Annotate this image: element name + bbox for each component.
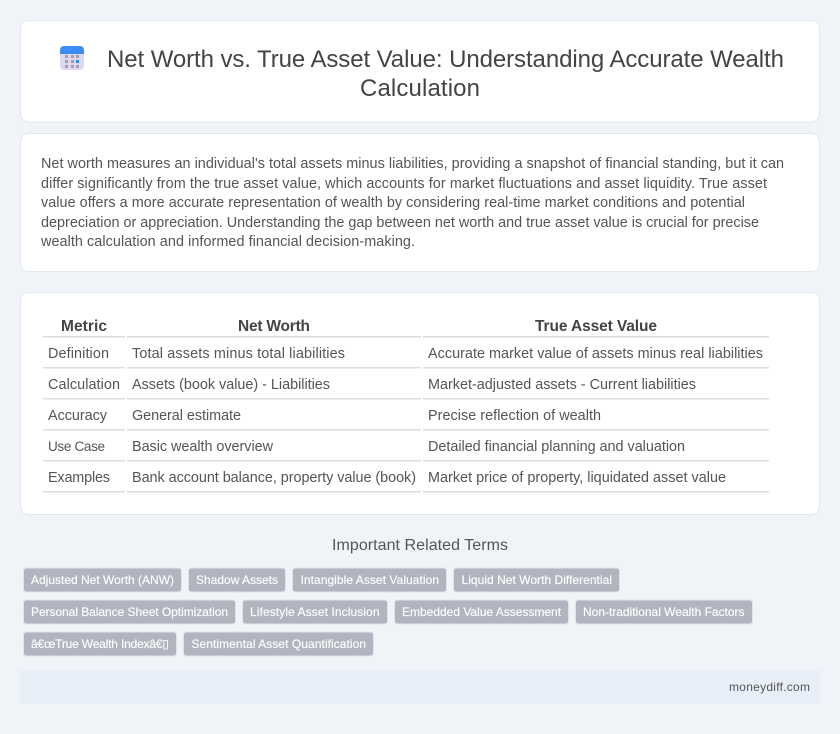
tag: Embedded Value Assessment — [402, 605, 562, 619]
panel: title header — [20, 20, 820, 122]
footer: source: moneydiff.com — [729, 680, 810, 694]
tag — [188, 568, 286, 592]
table row: use case: Detailed financial planning and valuation — [428, 439, 685, 455]
tag — [24, 600, 236, 624]
table row: accuracy: Accuracy — [48, 408, 108, 424]
text block: summary: differ significantly from the true asset value, which accounts for market fluctuations and asset liquidity. True asset — [41, 176, 767, 192]
panel: summary paragraph — [20, 134, 820, 272]
tag — [454, 568, 620, 592]
tag — [184, 632, 374, 656]
table row: examples — [48, 470, 726, 486]
table row: use case — [48, 439, 685, 455]
table row: examples: Market price of property, liquidated asset value — [428, 470, 726, 486]
table row: accuracy — [48, 408, 601, 424]
tag — [24, 568, 182, 592]
text block: summary — [40, 156, 784, 250]
tag: Personal Balance Sheet Optimization — [31, 605, 228, 619]
text block: summary: depreciation or appreciation. Understanding the gap between net worth and true asset value is crucial for precise — [41, 215, 759, 231]
table row: definition: Definition — [48, 346, 109, 362]
table row: accuracy: Precise reflection of wealth — [428, 408, 601, 424]
tag — [576, 600, 752, 624]
title: Calculation — [360, 75, 480, 102]
icon: calendar — [60, 46, 84, 70]
table row: definition — [48, 346, 763, 362]
table row: definition: Accurate market value of assets minus real liabilities — [428, 346, 763, 362]
table row: use case: Use Case — [48, 439, 105, 454]
table header: True Asset Value — [535, 318, 657, 335]
title: Net Worth vs. True Asset Value: Understanding Accurate Wealth — [107, 46, 784, 73]
tag — [394, 600, 568, 624]
tag: Shadow Assets — [196, 573, 278, 587]
table row: calculation — [48, 377, 696, 393]
tag: Adjusted Net Worth (ANW) — [31, 573, 174, 587]
tag: Intangible Asset Valuation — [300, 573, 439, 587]
title — [107, 46, 784, 102]
panel: comparison table — [20, 292, 820, 514]
table row: use case: Basic wealth overview — [132, 439, 274, 455]
table row: examples: Bank account balance, property value (book) — [132, 470, 416, 486]
tag: Sentimental Asset Quantification — [192, 637, 366, 651]
table row: examples: Examples — [48, 470, 110, 486]
tags: related terms — [24, 568, 752, 656]
tag: Non-traditional Wealth Factors — [583, 605, 744, 619]
table row: calculation: Calculation — [48, 377, 120, 393]
text block: summary: Net worth measures an individual's total assets minus liabilities, providing a snapshot of financial standing, but it can — [41, 156, 784, 172]
table header: Metric — [61, 318, 107, 335]
tag: Liquid Net Worth Differential — [462, 573, 612, 587]
tag: â€œTrue Wealth Indexâ€▯ — [31, 637, 169, 651]
heading: related terms: Important Related Terms — [332, 537, 508, 554]
table row: calculation: Market-adjusted assets - Current liabilities — [428, 377, 696, 393]
text block: summary: value offers a more accurate representation of wealth by considering real-time market conditions and potential — [41, 195, 745, 211]
table row: calculation: Assets (book value) - Liabilities — [132, 377, 330, 393]
table row: accuracy: General estimate — [132, 408, 241, 424]
tag — [24, 632, 176, 656]
tag: Lifestyle Asset Inclusion — [250, 605, 380, 619]
table row: definition: Total assets minus total liabilities — [132, 346, 345, 362]
footer — [20, 670, 820, 704]
table header — [61, 318, 657, 335]
tag — [292, 568, 446, 592]
tag — [242, 600, 388, 624]
table header: Net Worth — [238, 318, 310, 335]
text block: summary: wealth calculation and informed financial decision-making. — [40, 234, 415, 250]
